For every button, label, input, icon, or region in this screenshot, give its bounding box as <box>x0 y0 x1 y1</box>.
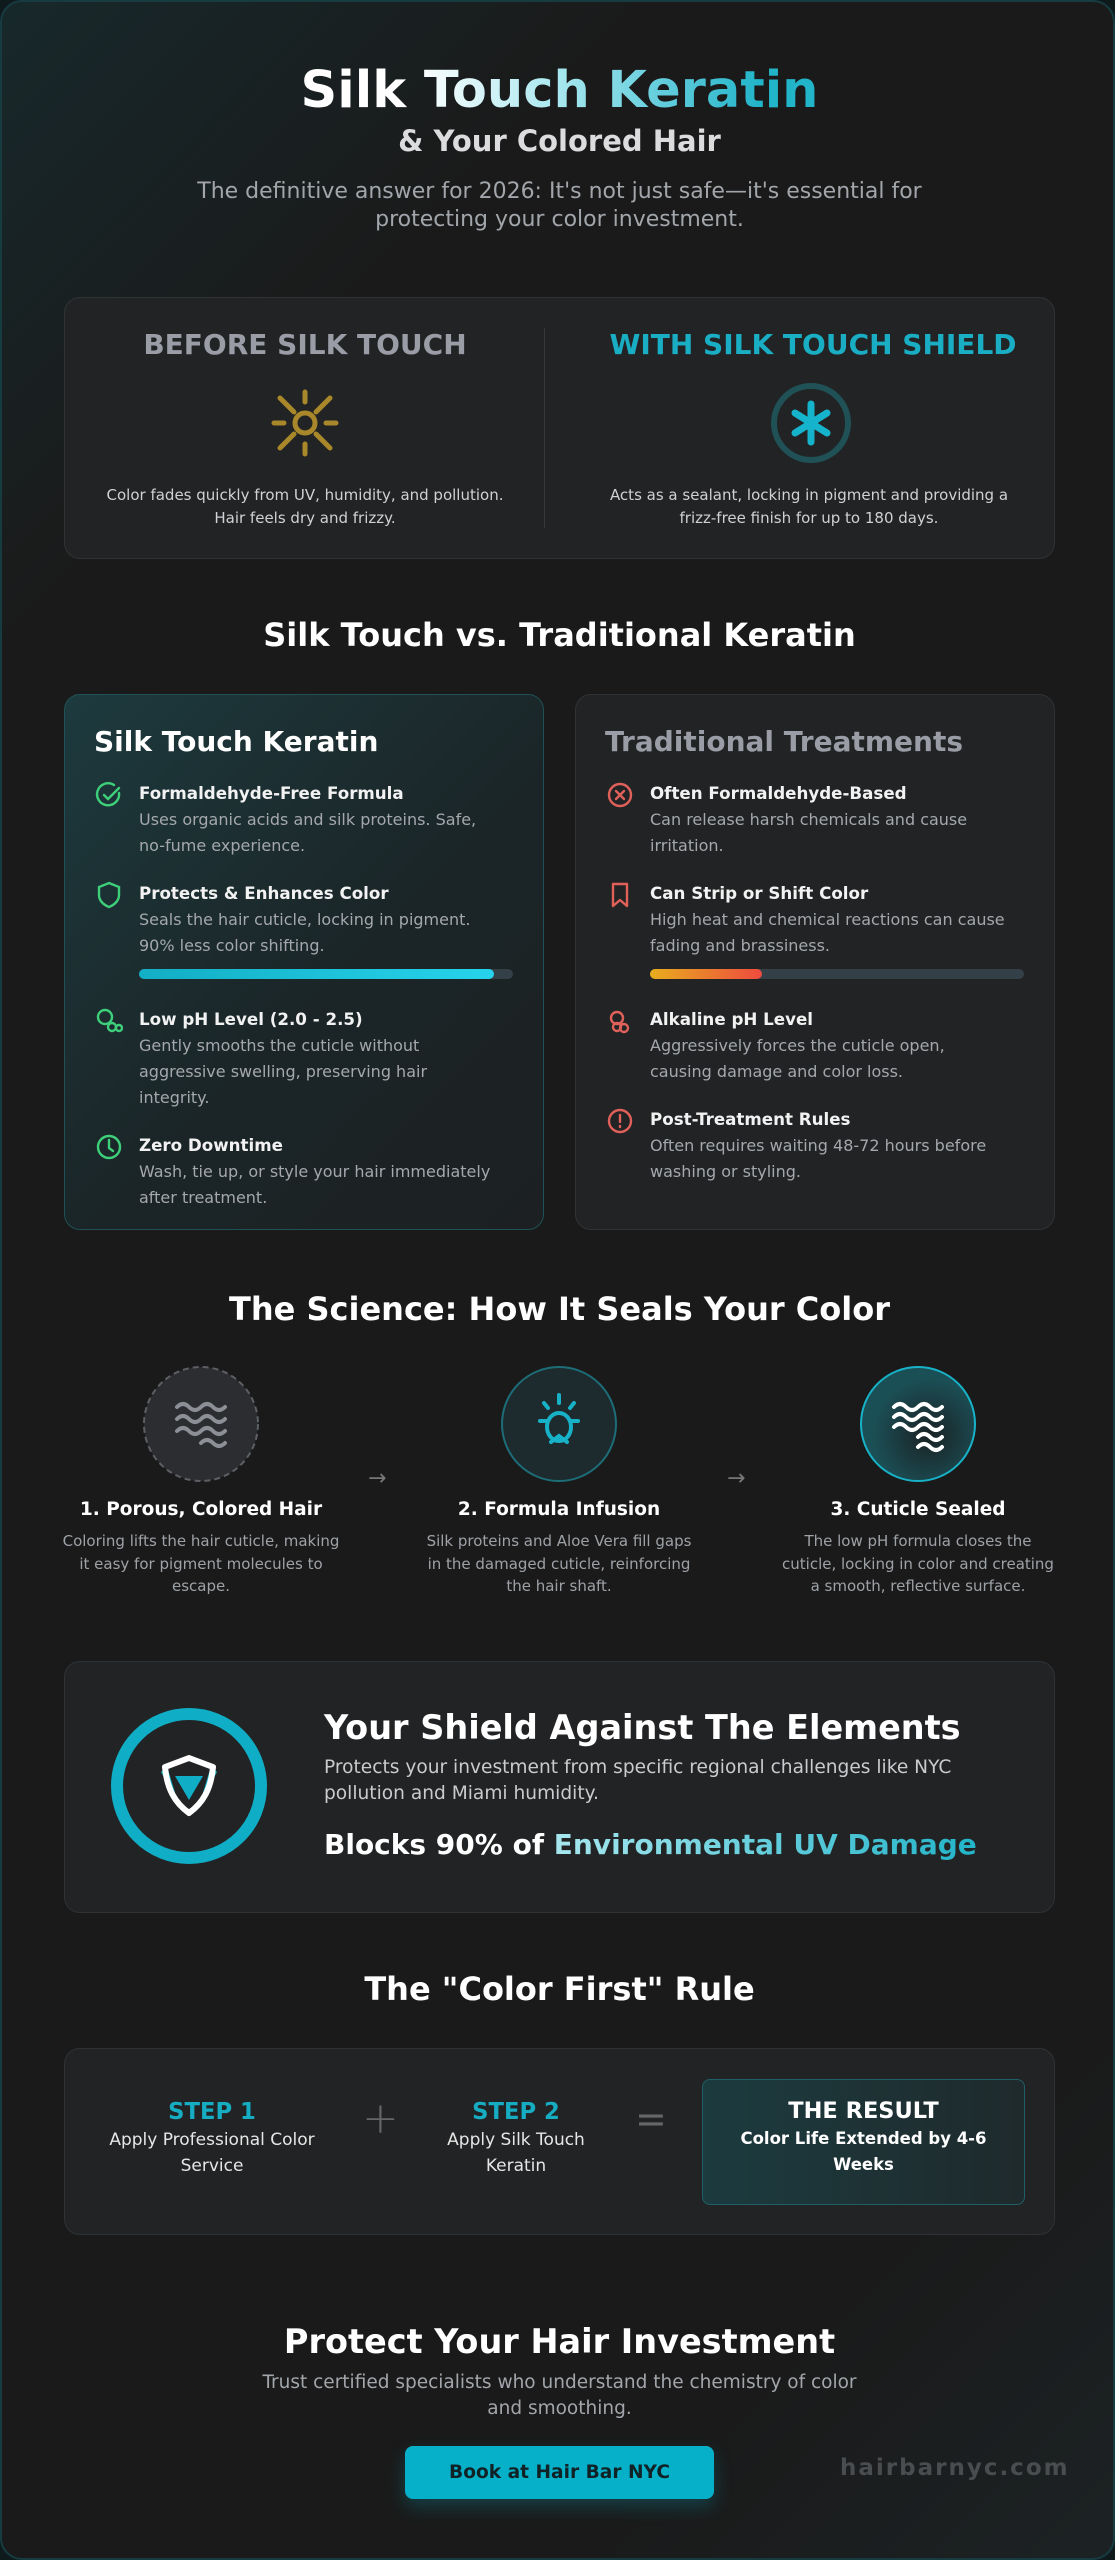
item: formaldehyde-free <box>96 782 476 855</box>
icon: infusion <box>501 1366 617 1482</box>
panel: silk touch keratin: Wash, tie up, or style your hair immediately after treatment. <box>139 1162 490 1207</box>
before heading: BEFORE SILK TOUCH <box>143 328 467 361</box>
shield heading: Your Shield Against The Elements <box>324 1708 961 1747</box>
icon: sun <box>272 390 338 456</box>
shield stat: Blocks 90% of Environmental UV Damage <box>324 1828 977 1861</box>
panel: traditional treatments: Often Formaldehyde-Based <box>650 783 907 803</box>
step: porous hair <box>63 1366 339 1595</box>
step 2 <box>447 2099 585 2176</box>
step: cuticle sealed: The low pH formula closes the cuticle, locking in color and creating a smooth, reflective surface. <box>782 1532 1054 1595</box>
arrow 2: → <box>727 1466 745 1491</box>
step 1: STEP 1 <box>168 2099 256 2125</box>
shield text: Protects your investment from specific regional challenges like NYC pollution and Miami humidity. <box>324 1757 951 1804</box>
heading: color first: The "Color First" Rule <box>364 1970 755 2008</box>
panel: silk touch keratin: Seals the hair cuticle, locking in pigment. 90% less color shifting. <box>139 910 470 955</box>
card title: Traditional Treatments <box>605 725 963 758</box>
step 1: Apply Professional Color Service <box>109 2130 315 2176</box>
panel: silk touch keratin: Formaldehyde-Free Formula <box>139 783 404 803</box>
panel: traditional treatments: Post-Treatment Rules <box>650 1109 850 1129</box>
before text: Color fades quickly from UV, humidity, and pollution. Hair feels dry and frizzy. <box>107 486 503 527</box>
arrow 1: → <box>368 1466 386 1491</box>
panel: traditional treatments: Often requires waiting 48-72 hours before washing or styling. <box>650 1136 986 1181</box>
step: cuticle sealed: 3. Cuticle Sealed <box>830 1499 1006 1520</box>
panel: traditional treatments: Alkaline pH Level <box>650 1009 813 1029</box>
card title: Silk Touch Keratin <box>94 725 378 758</box>
step: formula infusion: 2. Formula Infusion <box>458 1499 660 1520</box>
panel: traditional treatments: Aggressively forces the cuticle open, causing damage and color loss. <box>650 1036 945 1081</box>
item: strip color <box>612 882 1024 979</box>
watermark: hairbarnyc.com <box>840 2455 1070 2481</box>
step: formula infusion <box>427 1366 691 1595</box>
cta text: Trust certified specialists who understand the chemistry of color and smoothing. <box>262 2372 857 2419</box>
step 2: Apply Silk Touch Keratin <box>447 2130 585 2176</box>
heading: science: The Science: How It Seals Your Color <box>229 1290 890 1328</box>
item: formaldehyde-based <box>608 782 967 855</box>
panel: traditional treatments: Can Strip or Shift Color <box>650 883 868 903</box>
intro text: The definitive answer for 2026: It's not just safe—it's essential for protecting your color investment. <box>197 179 922 232</box>
panel: silk touch keratin: Zero Downtime <box>139 1135 283 1155</box>
icon: shield star <box>771 383 851 463</box>
result box: THE RESULT <box>788 2098 939 2124</box>
result box <box>702 2079 1025 2205</box>
panel: shield <box>64 1661 1055 1913</box>
panel: silk touch keratin: Protects & Enhances Color <box>139 883 389 903</box>
panel: silk touch keratin <box>64 694 544 1230</box>
step: porous hair: 1. Porous, Colored Hair <box>80 1499 322 1520</box>
panel: traditional treatments <box>575 694 1055 1230</box>
bar: 90% <box>139 969 513 979</box>
icon: porous <box>143 1366 259 1482</box>
item: low ph <box>96 1008 428 1107</box>
button: Book at Hair Bar NYC <box>449 2462 670 2483</box>
with text: Acts as a sealant, locking in pigment and providing a frizz-free finish for up to 180 days. <box>610 486 1008 527</box>
button <box>405 2446 714 2499</box>
panel: silk touch keratin: Uses organic acids and silk proteins. Safe, no-fume experience. <box>139 810 476 855</box>
subtitle: & Your Colored Hair <box>398 124 721 158</box>
equals: = <box>635 2097 667 2141</box>
item: zero downtime <box>96 1134 490 1207</box>
panel: before vs with <box>64 297 1055 559</box>
title <box>2 58 1115 124</box>
heading: protect: Protect Your Hair Investment <box>284 2322 835 2361</box>
panel: traditional treatments: Can release harsh chemicals and cause irritation. <box>650 810 967 855</box>
item: protects color <box>98 882 513 979</box>
panel: silk touch keratin: Gently smooths the cuticle without aggressive swelling, preserving hair integrity. <box>139 1036 427 1107</box>
item: post-treatment rules <box>608 1108 986 1181</box>
item: alkaline ph <box>610 1009 945 1081</box>
with heading: WITH SILK TOUCH SHIELD <box>609 328 1017 361</box>
panel: color first steps <box>64 2048 1055 2235</box>
icon: sealed <box>860 1366 976 1482</box>
step 2: STEP 2 <box>472 2099 560 2125</box>
plus: + <box>362 2093 399 2144</box>
step: cuticle sealed <box>782 1366 1054 1595</box>
step 1 <box>109 2099 315 2176</box>
bar: damage <box>650 969 1024 979</box>
step: porous hair: Coloring lifts the hair cuticle, making it easy for pigment molecules to escape. <box>63 1532 339 1595</box>
icon: shield ring <box>111 1708 267 1864</box>
result box: Color Life Extended by 4-6 Weeks <box>740 2129 987 2174</box>
heading: comparison: Silk Touch vs. Traditional Keratin <box>263 616 856 654</box>
title: Silk Touch Keratin <box>301 61 818 120</box>
panel: traditional treatments: High heat and chemical reactions can cause fading and brassiness. <box>650 910 1005 955</box>
step: formula infusion: Silk proteins and Aloe Vera fill gaps in the damaged cuticle, reinforcing the hair shaft. <box>427 1532 691 1595</box>
panel: silk touch keratin: Low pH Level (2.0 - 2.5) <box>139 1009 363 1029</box>
